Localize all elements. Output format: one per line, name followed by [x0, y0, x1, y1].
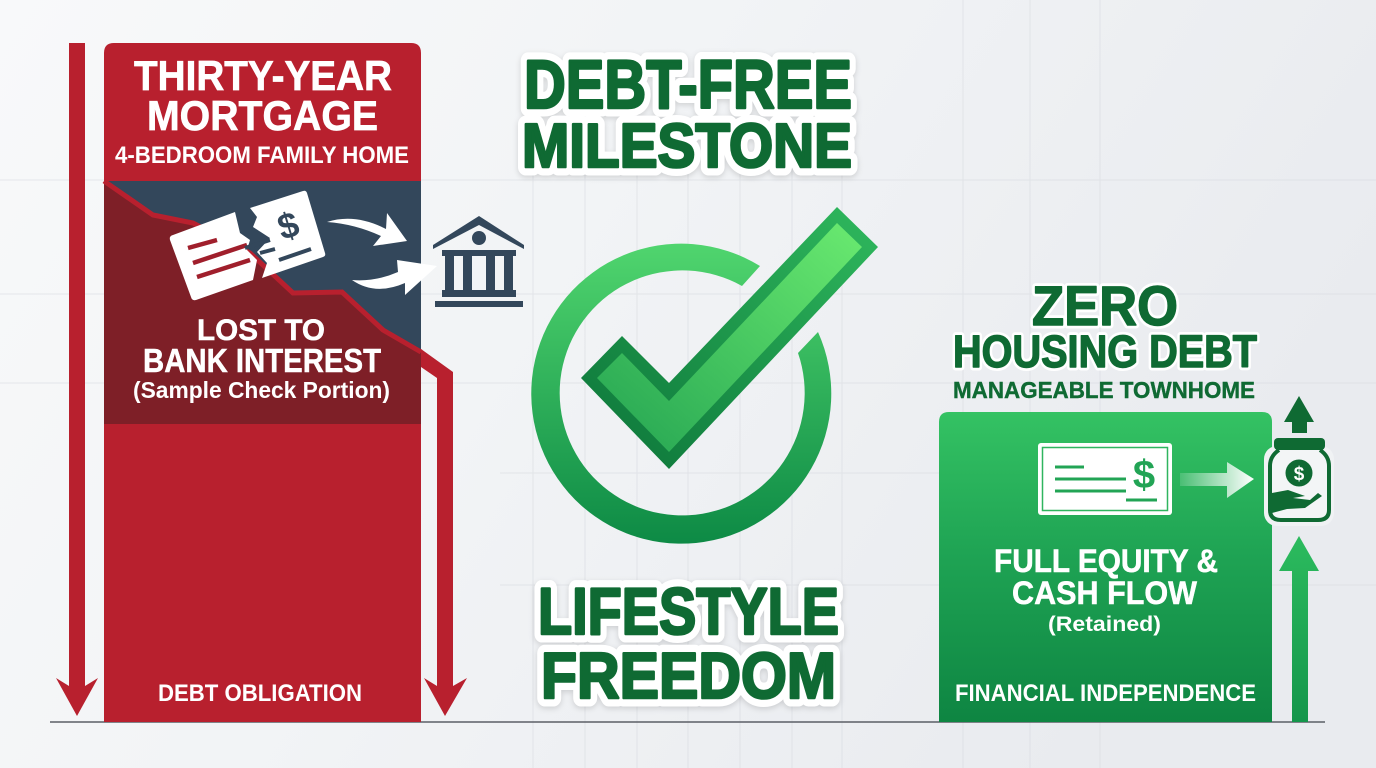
heading: zero housing debt: HOUSING DEBT — [953, 326, 1257, 377]
title: debt-free milestone — [522, 46, 852, 181]
label: debt obligation: DEBT OBLIGATION — [158, 680, 362, 707]
arrow: upper arrow to bank — [327, 213, 407, 246]
heading: zero housing debt — [953, 274, 1257, 377]
title: lifestyle freedom: LIFESTYLE — [538, 574, 839, 648]
panel: zero housing debt — [939, 412, 1272, 722]
heading: zero housing debt: ZERO — [1032, 274, 1178, 337]
heading: zero housing debt: ZERO — [1032, 274, 1178, 337]
heading: zero housing debt: HOUSING DEBT — [953, 326, 1257, 377]
arrow: green rising arrow — [1279, 536, 1319, 722]
chart: dark red interest area — [104, 181, 421, 424]
text: lost to bank interest: LOST TO — [197, 314, 325, 347]
title: debt-free milestone: MILESTONE — [522, 112, 852, 181]
declining red line — [104, 181, 421, 352]
heading: thirty-year mortgage: MORTGAGE — [147, 92, 378, 139]
heading: thirty-year mortgage: THIRTY-YEAR — [134, 52, 392, 99]
baseline axis — [50, 721, 1325, 723]
subheading: manageable townhome: MANAGEABLE TOWNHOME — [953, 377, 1255, 403]
panel: interest section navy background — [104, 181, 421, 424]
arrow: falling line right arrow — [421, 349, 467, 716]
text: sample check portion: (Sample Check Portion) — [133, 377, 390, 403]
title: lifestyle freedom: LIFESTYLE — [538, 574, 839, 648]
ring — [531, 244, 831, 544]
label: financial independence: FINANCIAL INDEPENDENCE — [955, 680, 1256, 707]
arrow: lower arrow to bank — [352, 260, 437, 295]
icon: torn check: $ — [273, 203, 304, 248]
icon: paycheck — [1038, 443, 1172, 515]
icon: torn check — [170, 191, 325, 300]
text: retained: (Retained) — [1048, 613, 1161, 636]
text: full equity and cash flow — [994, 543, 1218, 611]
title: lifestyle freedom — [538, 574, 839, 712]
text: full equity and cash flow: CASH FLOW — [1012, 575, 1198, 611]
text: lost to bank interest: BANK INTEREST — [143, 342, 381, 379]
text: lost to bank interest — [143, 314, 381, 379]
subheading: family home: 4-BEDROOM FAMILY HOME — [115, 142, 409, 169]
title: debt-free milestone: DEBT-FREE — [524, 46, 852, 123]
heading: thirty-year mortgage — [134, 52, 392, 139]
icon: bank — [433, 216, 524, 307]
arrow: check to jar — [1180, 462, 1254, 498]
arrow: dark green up arrow above jar — [1284, 396, 1314, 433]
arrow: left debt down arrow — [56, 43, 98, 716]
checkmark — [581, 207, 878, 469]
title: lifestyle freedom: FREEDOM — [541, 639, 836, 712]
title: debt-free milestone: DEBT-FREE — [524, 46, 852, 123]
icon: money jar — [1264, 438, 1334, 526]
title: debt-free milestone: MILESTONE — [522, 112, 852, 181]
icon: green ring and checkmark — [531, 207, 878, 544]
panel: thirty-year mortgage — [104, 43, 437, 722]
icon: paycheck: $ — [1133, 453, 1155, 497]
text: full equity and cash flow: FULL EQUITY & — [994, 543, 1218, 579]
icon: money jar: $ — [1294, 464, 1305, 485]
title: lifestyle freedom: FREEDOM — [541, 639, 836, 712]
